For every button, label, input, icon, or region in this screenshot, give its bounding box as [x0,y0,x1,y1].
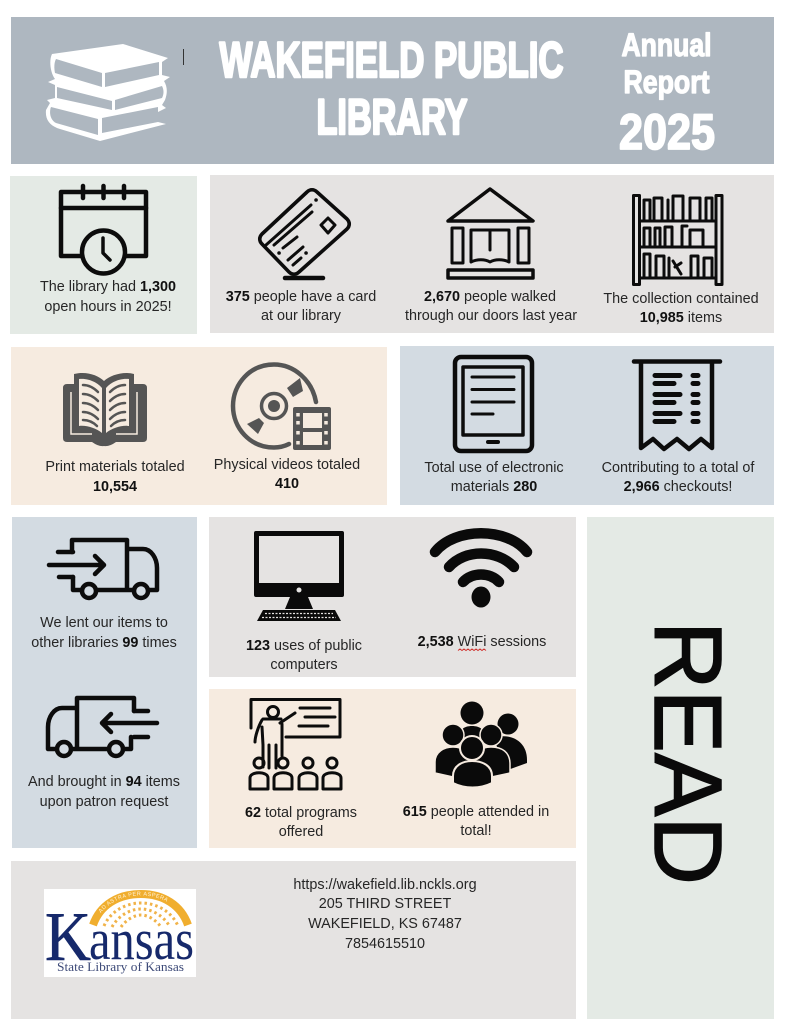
cursor tick [183,49,184,65]
text: items lent: 99 times [122,635,177,651]
panel: open hours [10,176,197,334]
icon: open book [63,373,147,446]
text: library card: people have a card [254,289,376,305]
logo: State Library of Kansas: State Library of Kansas [57,960,184,974]
vertical word READ: READ [634,621,741,885]
title: WAKEFIELD PUBLIC [220,32,564,88]
text: items borrowed: 94 items [126,774,180,790]
text: door count: 2,670 [424,289,460,305]
text: open hours: The library had [40,279,140,295]
icon: video disc and film [233,364,331,450]
report label: Annual [622,27,712,63]
text: wifi sessions: 2,538 [418,634,454,650]
text: collection: The collection contained [603,291,759,307]
text: print materials: 10,554 [93,479,137,495]
text: electronic materials: Total use of electronic [424,460,564,476]
text: wifi sessions: WiFi sessions [458,634,546,650]
icon: calendar with clock [61,186,146,274]
icon: library building [448,189,533,278]
icon: delivery truck incoming [48,698,157,756]
icon: receipt [634,362,720,449]
icon: e-reader tablet [455,357,532,451]
text: door count: through our doors last year [405,308,577,324]
title: LIBRARY [316,89,468,145]
text: programs offered: offered [279,824,323,840]
logo: State Library of Kansas [44,889,196,977]
panel: read banner [587,517,774,1019]
panel: electronic and checkouts [400,346,774,505]
logo: State Library of Kansas: K [45,899,91,976]
text: program attendance: total! [460,823,492,839]
report label: Report [624,64,710,100]
panel: interlibrary loans [12,517,197,848]
text: library card: at our library [261,308,342,324]
panel: visitors and collection [210,175,774,333]
panel: contact footer [11,861,576,1019]
icon: presenter at board [250,700,341,789]
text: contact details: https://wakefield.lib.nckls.org [293,877,477,893]
text: electronic materials: 280 [513,479,537,495]
text: door count: people walked [464,289,556,305]
text: collection: 10,985 [640,310,684,326]
panel: header banner [11,17,774,164]
text: print materials: Print materials totaled [45,459,185,475]
icon: desktop computer [254,531,344,621]
text: program attendance: 615 [403,804,427,820]
icon: wifi [435,533,527,608]
text: contact details: 205 THIRD STREET [319,896,451,912]
text: open hours: open hours in 2025! [44,299,172,315]
text: public computers: uses of public [274,638,362,654]
text: items borrowed: upon patron request [40,794,168,810]
text: items lent: We lent our items to [40,615,168,631]
icon: delivery truck outgoing [49,540,157,598]
panel: physical materials [11,347,387,505]
text: items lent: other libraries [31,635,122,651]
text: programs offered: total programs [265,805,357,821]
panel: technology [209,517,576,677]
text: programs offered: 62 [245,805,261,821]
icon: crowd of people [435,702,527,788]
text: contact details: WAKEFIELD, KS 67487 [308,916,462,932]
text: collection: items [688,310,722,326]
text: library card: 375 [226,289,250,305]
logo: State Library of Kansas: AD ASTRA PER ASPERA [99,892,168,914]
text: physical videos: Physical videos totaled [214,457,360,473]
text: items borrowed: And brought in [28,774,126,790]
text: public computers: 123 [246,638,270,654]
report label: 2025 [619,104,715,160]
text: electronic materials: materials [451,479,513,495]
text: physical videos: 410 [275,476,299,492]
report label [619,27,715,160]
icon: stack of books [46,44,170,141]
text: public computers: computers [270,657,338,673]
icon: library card [260,190,349,278]
icon: bookshelf [634,196,722,284]
spellcheck underline [458,649,486,650]
text: contact details: 7854615510 [345,936,425,952]
text: checkouts: 2,966 [624,479,660,495]
text: contact details [293,877,477,952]
title [220,32,564,145]
logo: State Library of Kansas: ansas [89,907,194,972]
text: checkouts: Contributing to a total of [602,460,755,476]
panel: programs [209,689,576,848]
text: program attendance: people attended in [431,804,549,820]
text: open hours: 1,300 [140,279,176,295]
text: checkouts: checkouts! [664,479,732,495]
